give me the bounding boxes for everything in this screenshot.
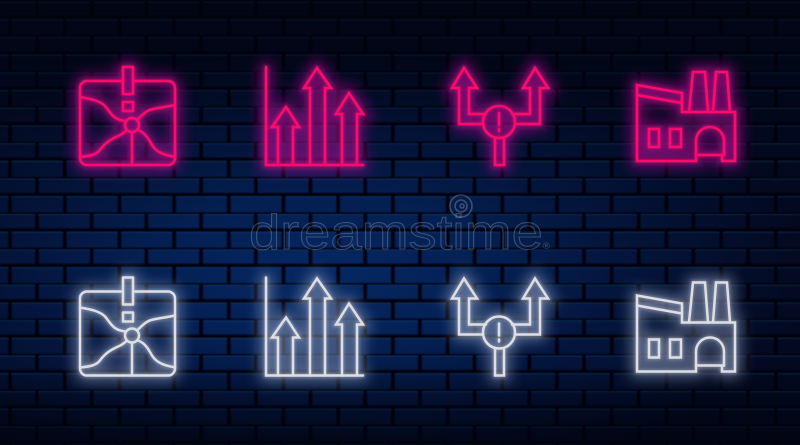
icon: white forked arrows with warning circle — [452, 278, 548, 376]
watermark spiral logo — [450, 195, 472, 217]
icon: pink map with fault lines and warning — [80, 67, 175, 165]
watermark wordmark: dreamstime — [249, 206, 543, 260]
icon: white rising arrows chart — [266, 278, 363, 376]
icon: white factory — [637, 282, 735, 372]
watermark registered mark: ® — [543, 241, 550, 251]
icon: pink rising arrows chart — [266, 67, 363, 165]
icon: white map with fault lines and warning — [80, 278, 175, 376]
watermark: dreamstime — [249, 195, 550, 260]
icon: pink forked arrows with warning circle — [452, 68, 548, 165]
icon: pink factory — [637, 72, 735, 161]
